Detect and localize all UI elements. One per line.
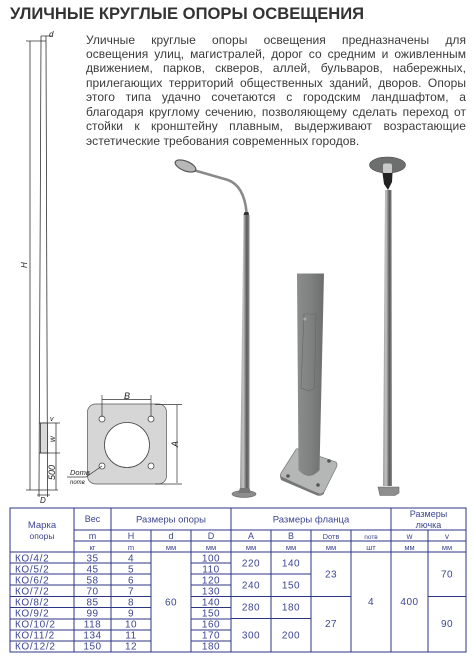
table: pole specifications: 27 [325,619,337,630]
table: pole specifications [10,508,466,652]
table: pole specifications: КО/4/2 [15,554,49,564]
table: pole specifications: H [128,531,134,541]
table: pole specifications: КО/5/2 [15,564,49,576]
table: pole specifications: 220 [242,558,260,570]
table: pole specifications: 160 [202,620,220,630]
text block: description: эстетические требования современных городов. [86,134,359,148]
table: pole specifications: 35 [86,554,99,564]
table: pole specifications: 60 [165,598,177,608]
table: pole specifications: КО/6/2 [15,576,49,586]
table: pole specifications: 400 [400,597,419,608]
table: pole specifications: кг [89,543,96,552]
table: pole specifications: 58 [86,576,99,586]
table: pole specifications: КО/9/2 [15,608,49,620]
table: pole specifications: Размеры опоры [136,514,206,526]
photo: street lamp with curved arm [174,157,256,497]
table: pole specifications: 180 [282,602,300,614]
table: pole specifications: 70 [441,570,453,580]
table: pole specifications: мм [326,543,336,552]
drawing: pole elevation with dimensions: 500 [47,465,57,480]
table: pole specifications: m [89,531,96,541]
photo: street lamp with disc top [370,157,406,496]
table: pole specifications: 85 [86,598,99,608]
table: pole specifications: Размеры [410,509,447,519]
drawing: flange plate: nотв [70,480,85,486]
table: pole specifications: КО/11/2 [15,630,55,642]
table: pole specifications: 100 [202,554,220,564]
table: pole specifications: D [208,531,215,541]
table: pole specifications: шт [366,543,376,552]
photo: pole base close-up with flange [280,274,337,496]
table: pole specifications: 5 [128,564,134,576]
text block: description: стойки к кронштейну плавным, выдерживают возрастающие [86,119,466,133]
table: pole specifications: 90 [441,619,453,630]
table: pole specifications: 99 [86,608,99,620]
drawing: pole elevation with dimensions: w [48,435,57,442]
table: pole specifications: мм [442,543,452,552]
table: pole specifications: Вес [85,514,101,524]
table: pole specifications: 120 [202,576,220,586]
table: pole specifications: 300 [242,630,260,642]
table: pole specifications: 4 [128,554,134,564]
table: pole specifications: 70 [86,586,99,598]
table: pole specifications: 12 [125,642,137,652]
table: pole specifications: 7 [128,586,134,598]
table: pole specifications: лючка [416,520,441,530]
table: pole specifications: КО/10/2 [15,620,56,630]
table: pole specifications: 45 [86,564,99,576]
table: pole specifications: КО/12/2 [15,642,56,652]
table: pole specifications: 110 [202,564,220,576]
text block: description: освещения улиц, магистралей, дорог со средним и оживленным [86,47,466,61]
table: pole specifications: мм [166,543,176,552]
table: pole specifications: v [445,532,449,541]
table: pole specifications: 200 [282,630,300,642]
table: pole specifications: мм [286,543,296,552]
drawing: pole elevation with dimensions [20,30,60,505]
table: pole specifications: 11 [125,630,137,642]
table: pole specifications: 240 [242,580,260,592]
text block: description: этого типа удачно сочетаются с городским ландшафтом, а [86,90,466,104]
drawing: flange plate: Dотв [70,468,90,477]
table: pole specifications: 150 [83,642,102,652]
table: pole specifications: 130 [202,586,220,598]
drawing: pole elevation with dimensions: d [49,30,54,39]
table: pole specifications: 180 [202,642,220,652]
text block: description [86,32,466,148]
text block: description: благодаря круглому сечению, позволяющему сделать переход от [86,105,466,119]
table: pole specifications: 4 [368,597,374,608]
table: pole specifications: 6 [128,576,134,586]
table: pole specifications: Dотв [323,532,339,541]
table: pole specifications: 150 [202,608,220,620]
table: pole specifications: мм [404,543,415,552]
table: pole specifications: 150 [282,580,300,592]
table: pole specifications: Размеры фланца [273,514,350,526]
table: pole specifications: w [406,532,413,541]
table: pole specifications: 140 [282,558,300,570]
table: pole specifications: 140 [202,598,220,608]
drawing: pole elevation with dimensions: H [20,262,29,268]
text block: description: движением, парков, скверов, аллей, бульваров, набережных, [86,61,466,75]
drawing: flange plate: B [124,391,130,401]
table: pole specifications: мм [206,543,216,552]
table: pole specifications: d [168,531,174,541]
drawing: pole elevation with dimensions: D [40,496,46,505]
table: pole specifications: 118 [84,620,101,630]
table: pole specifications: 9 [128,608,134,620]
table: pole specifications: 23 [325,570,337,580]
table: pole specifications: мм [246,543,256,552]
table: pole specifications: КО/7/2 [15,586,49,598]
table: pole specifications: nотв [364,534,378,541]
title: УЛИЧНЫЕ КРУГЛЫЕ ОПОРЫ ОСВЕЩЕНИЯ [10,4,364,22]
text block: description: прилегающих территорий общественных зданий, дворов. Опоры [86,76,466,90]
table: pole specifications: A [248,531,254,541]
table: pole specifications: 10 [125,620,137,630]
table: pole specifications: опоры [30,531,54,541]
drawing: flange plate: A [170,441,180,448]
drawing: pole elevation with dimensions: v [50,416,54,423]
table: pole specifications: 134 [83,630,102,642]
drawing: flange plate [67,391,182,486]
table: pole specifications: КО/8/2 [15,598,49,608]
table: pole specifications: Марка [28,520,57,531]
text block: description: Уличные круглые опоры освещения предназначены для [86,32,466,46]
table: pole specifications: 170 [202,630,220,642]
table: pole specifications: m [128,543,134,552]
table: pole specifications: 280 [242,602,260,614]
table: pole specifications: B [288,531,294,541]
table: pole specifications: 8 [128,598,134,608]
